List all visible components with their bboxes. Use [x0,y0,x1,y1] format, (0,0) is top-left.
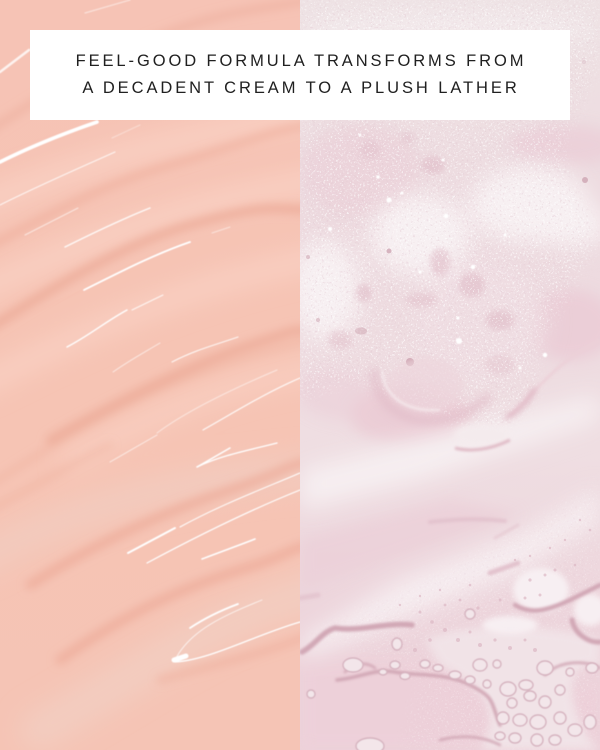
small foam bubbles [399,519,591,652]
foam blobs [482,568,600,634]
bright bubbles [328,134,547,370]
white foam cloud [290,10,600,660]
large clear bubble [369,358,558,452]
pale cream ridges [0,112,320,730]
foam sparkle texture [300,0,600,750]
mid streaks in lather [300,519,518,598]
darker cream folds [0,0,310,680]
title banner [30,30,570,120]
lather foam edge: dark outlines [302,585,600,745]
title text [76,52,526,97]
title text: FEEL-GOOD FORMULA TRANSFORMS FROM [76,52,526,70]
panel: lather texture [290,0,600,750]
panel: cream texture [0,0,320,750]
dark specks [306,60,588,366]
foam texture behind bubble network [428,628,600,750]
bubble network [307,609,598,750]
title text: A DECADENT CREAM TO A PLUSH LATHER [82,79,520,97]
smooth pink zones [310,128,600,540]
pink patches in foam [328,132,515,375]
glossy highlights [0,0,300,662]
